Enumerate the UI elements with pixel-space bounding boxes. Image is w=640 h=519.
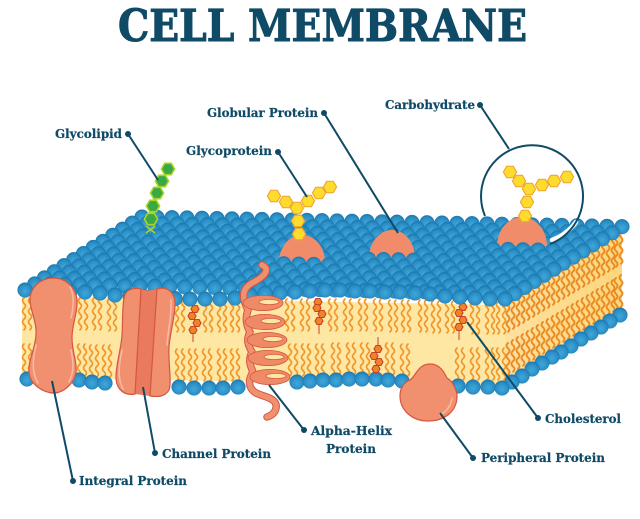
- label: Glycolipid: Glycolipid: [55, 127, 123, 141]
- label: Glycoprotein: [186, 144, 307, 197]
- lipid tails: side face: [506, 232, 622, 375]
- integral protein: [29, 278, 77, 393]
- label: Channel Protein: [143, 387, 271, 461]
- lipid tails: front lower layer: [22, 343, 506, 381]
- top surface: phospholipid heads with embedded proteins: [18, 210, 629, 306]
- label: Glycoprotein: Glycoprotein: [186, 144, 272, 158]
- front face: hydrophobic core: [22, 296, 505, 385]
- label: Carbohydrate: [385, 98, 509, 149]
- label: Channel Protein: Channel Protein: [162, 447, 271, 461]
- dome: glycoprotein base: [279, 235, 325, 262]
- label: Glycolipid: [55, 127, 158, 180]
- label: Peripheral Protein: Peripheral Protein: [481, 451, 605, 465]
- label: Globular Protein: [207, 106, 398, 233]
- helix rings: [243, 295, 290, 385]
- dome: carbohydrate protein: [497, 217, 547, 246]
- right side face: [505, 232, 622, 385]
- label: Carbohydrate: Carbohydrate: [385, 98, 475, 112]
- label: Globular Protein: Globular Protein: [207, 106, 318, 120]
- label: Cholesterol: [467, 322, 621, 426]
- label: Cholesterol: Cholesterol: [545, 412, 621, 426]
- helix backbone and tail: [244, 265, 276, 417]
- label: Alpha-Helix Protein: [269, 385, 393, 456]
- peripheral protein: [400, 364, 457, 421]
- panel: membrane cross-section: [18, 210, 629, 395]
- label: Integral Protein: Integral Protein: [79, 474, 187, 488]
- alpha-helix protein: [243, 265, 290, 417]
- label: Alpha-Helix Protein: Alpha-Helix: [310, 424, 393, 438]
- dome: globular protein: [369, 230, 415, 258]
- channel protein: [116, 288, 175, 396]
- label: Alpha-Helix Protein: Protein: [326, 442, 376, 456]
- lipid tails: front upper layer: [22, 298, 506, 334]
- glycoprotein sugar chain: [267, 181, 337, 240]
- glycolipid chain: [144, 163, 175, 233]
- lower phospholipid heads: [20, 308, 627, 395]
- label: Integral Protein: [52, 381, 187, 488]
- cholesterol molecules: [188, 298, 467, 372]
- label: Peripheral Protein: [440, 413, 605, 465]
- title: CELL MEMBRANE: [118, 1, 527, 52]
- carbohydrate sugar chain: [503, 166, 574, 222]
- callout circle: carbohydrate magnifier: [481, 145, 583, 244]
